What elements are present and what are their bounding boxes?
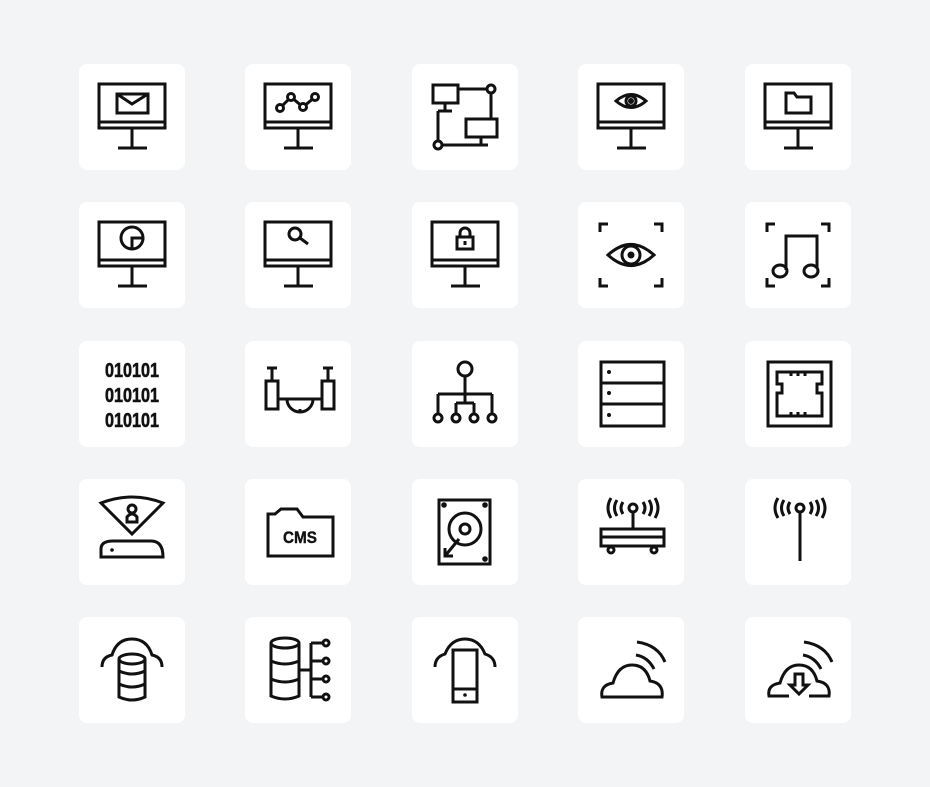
tile: monitor with pie chart — [79, 202, 185, 308]
tile: binary code — [79, 341, 185, 447]
tile: binary code: 010101 — [105, 385, 159, 407]
tile: binary code: 010101 — [105, 360, 159, 382]
tile: music scan — [745, 202, 851, 308]
tile: router — [578, 479, 684, 585]
tile: hard drive — [412, 479, 518, 585]
tile: monitor with folder — [745, 64, 851, 170]
tile: database network — [245, 617, 351, 723]
tile: drone — [245, 341, 351, 447]
tile: hierarchy — [412, 341, 518, 447]
tile: binary code: 010101 — [105, 410, 159, 432]
tile: monitor with padlock — [412, 202, 518, 308]
tile: cloud download — [745, 617, 851, 723]
tile: server rack — [578, 341, 684, 447]
tile: monitor with line chart — [245, 64, 351, 170]
tile: antenna — [745, 479, 851, 585]
tile: monitor with eye — [578, 64, 684, 170]
tile: eye scan — [578, 202, 684, 308]
tile: hologram — [79, 479, 185, 585]
tile: CMS folder: CMS — [283, 528, 317, 547]
tile: phone cloud — [412, 617, 518, 723]
tile: monitor with mail — [79, 64, 185, 170]
tile: cloud database — [79, 617, 185, 723]
tile: CMS folder — [245, 479, 351, 585]
tile: cloud signal — [578, 617, 684, 723]
tile: chip — [745, 341, 851, 447]
tile: network of monitors — [412, 64, 518, 170]
tile: monitor with search — [245, 202, 351, 308]
